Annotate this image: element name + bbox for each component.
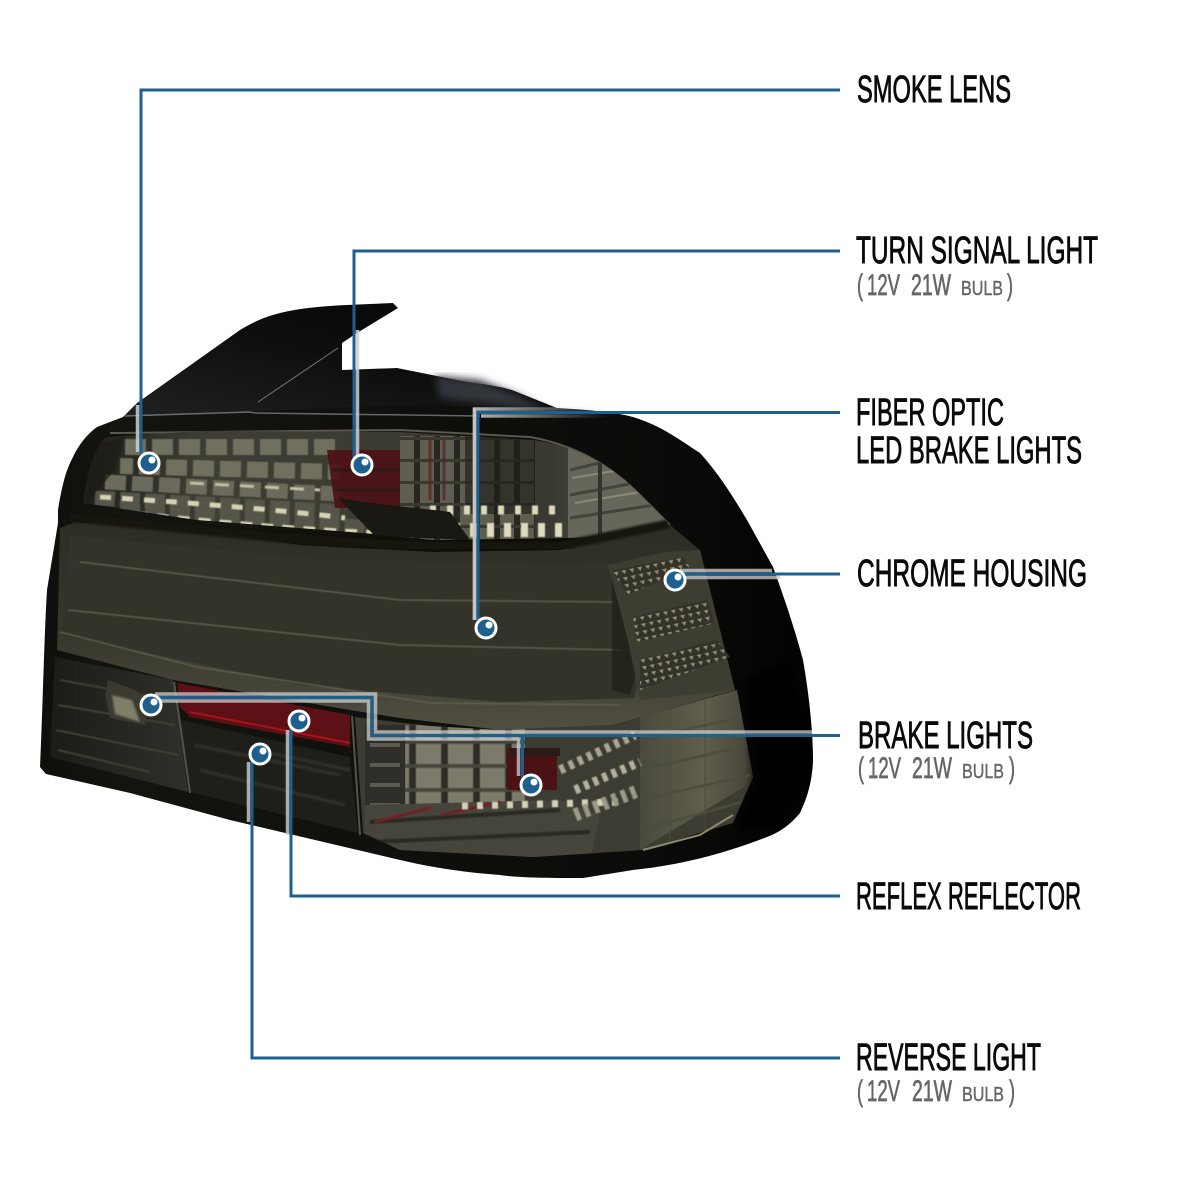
callout: reverse light [248,744,1041,1108]
label: SMOKE LENS [857,69,1011,111]
callout: brake lights [141,694,1033,795]
right clear corner [568,447,667,540]
leader line [680,572,840,576]
LED brake light band [57,517,735,730]
bulb spec: BULB [961,278,1003,300]
marker dot [250,744,270,764]
trunk lid spoiler [123,303,640,432]
marker dot [139,453,159,473]
bulb spec: ) [1009,1075,1015,1108]
vertical optics [405,725,525,805]
label: BRAKE LIGHTS [858,715,1033,757]
LED light bar [62,535,640,702]
center vertical optics [400,436,535,540]
label: REVERSE LIGHT [856,1037,1041,1079]
red tint on vertical dividers [430,440,444,500]
vertical halo [473,408,476,620]
marker dot [289,711,309,731]
bright highlight rows [100,483,565,533]
lens bottom rim [643,815,733,850]
callout line halo [155,694,812,776]
bulb spec [857,1075,1015,1108]
leader line [252,760,840,1058]
callout line halo [356,330,359,456]
marker dot [352,455,372,475]
bulb spec: 12V [867,269,900,302]
LED bar lines [60,562,620,705]
callout line halo [247,762,250,822]
lower left lines [56,680,178,772]
leader line [354,251,840,458]
dark reflection below red [338,498,470,540]
bulb spec: ( [858,752,864,785]
reverse lens divider [174,682,360,835]
leader line [291,728,840,896]
lens top rim [110,430,670,525]
bulb spec [858,752,1015,785]
bulb spec: ) [1007,269,1013,302]
chrome housing strips [608,550,735,700]
lower right lens [355,685,755,860]
right edge darkening [774,730,813,834]
bar corner shadow [612,565,640,695]
marker dot lower [521,775,541,795]
tail light product image [40,303,815,878]
bulb spec: ) [1009,752,1015,785]
marker dot [665,570,685,590]
callout: reflex reflector [288,711,1081,918]
bulb spec: ( [857,1075,863,1108]
reflector highlight [190,712,350,743]
marker dot [476,618,496,638]
reverse light lens [180,720,358,833]
leader line [478,412,840,620]
bulb spec [857,269,1013,302]
lower dark rows [365,800,600,860]
left dark corner [94,436,124,494]
bulb spec: 21W [912,752,952,785]
leader line [141,90,840,455]
callout: chrome housing [665,553,1087,595]
callout: fiber optic LED brake lights [474,392,1082,638]
callout line halo [474,409,610,620]
callout: turn signal light [352,230,1098,475]
housing body [40,405,813,878]
callout line halo [680,570,780,578]
right clear lens [640,685,755,850]
band top shadow [70,517,668,546]
bulb spec: BULB [962,761,1004,783]
reflex reflector [177,683,350,747]
bulb spec: 21W [911,269,951,302]
bulb spec: 12V [868,752,901,785]
upper lens [83,431,667,540]
diamond optics rows [95,447,380,528]
callout line halo [286,730,289,835]
callout line halo [136,405,139,452]
reverse lens streaks [195,745,350,805]
lower left lens [50,657,188,792]
marker dot upper [141,695,161,715]
callout: smoke lens [138,69,1011,473]
label: FIBER OPTIC [856,392,1004,434]
bright highlight rows [462,735,640,815]
bulb spec: ( [857,269,863,302]
leader line [151,698,840,778]
turn signal red [327,450,400,508]
reflection on spoiler edge [258,348,338,402]
body top reflection [125,412,480,416]
bulb spec: BULB [962,1084,1004,1106]
bulb spec: 12V [867,1075,900,1108]
brake red [507,748,557,790]
lower left highlights [105,680,150,725]
bulb spec: 21W [912,1075,952,1108]
